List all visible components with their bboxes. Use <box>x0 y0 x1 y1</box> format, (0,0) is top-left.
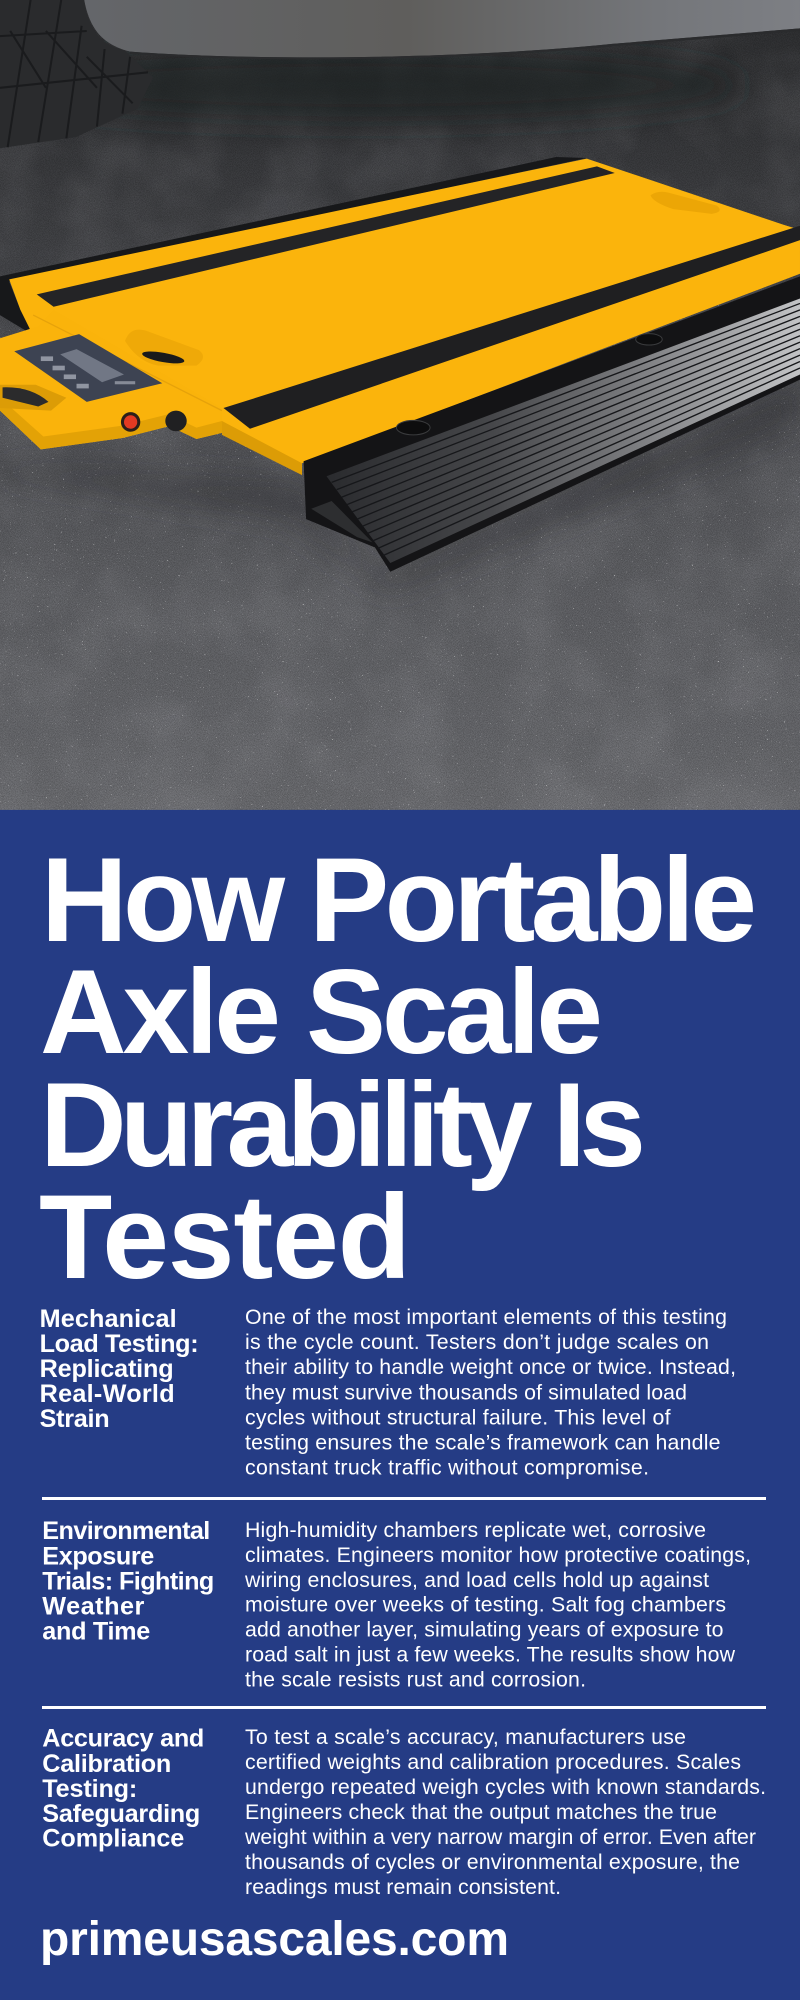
section 3 body: To test a scale’s accuracy, manufacturers use <box>245 1725 686 1749</box>
section 2 body: the scale resists rust and corrosion. <box>245 1668 586 1692</box>
title <box>39 833 757 1304</box>
title: Tested <box>39 1170 411 1304</box>
title: Durability Is <box>40 1058 646 1192</box>
blue content panel <box>0 810 800 2000</box>
section 3 body: certified weights and calibration procedures. Scales <box>245 1750 741 1774</box>
section 2 body: wiring enclosures, and load cells hold up against <box>244 1568 709 1592</box>
display panel <box>14 334 162 402</box>
section 1 body <box>245 1305 736 1480</box>
section 1 body: constant truck traffic without compromise. <box>245 1456 649 1480</box>
section 2 body: High-humidity chambers replicate wet, corrosive <box>245 1518 706 1542</box>
section 3 heading <box>42 1724 204 1852</box>
tire <box>0 0 153 148</box>
section 1 body: One of the most important elements of this testing <box>245 1305 727 1329</box>
section 1 heading: Replicating <box>40 1355 174 1383</box>
section 3 heading: Testing: <box>42 1775 137 1803</box>
section 2 heading: and Time <box>42 1618 150 1646</box>
controller housing <box>0 310 222 449</box>
section 3 heading: Accuracy and <box>42 1724 204 1752</box>
black knob <box>165 411 187 431</box>
car body <box>84 0 800 59</box>
footer website: primeusascales.com <box>40 1913 509 1966</box>
red button <box>121 412 140 432</box>
section 1 heading: Strain <box>40 1405 110 1433</box>
photo: portable axle scale on asphalt <box>0 0 800 810</box>
hardware at rear left <box>0 157 587 331</box>
rear black strip <box>37 166 615 307</box>
section 1 heading: Real-World <box>40 1380 175 1408</box>
yellow deck <box>9 159 800 463</box>
section 1 body: is the cycle count. Testers don’t judge scales on <box>245 1330 709 1354</box>
section 2 body: moisture over weeks of testing. Salt fog chambers <box>245 1592 726 1616</box>
section 1 body: testing ensures the scale’s framework can handle <box>245 1430 720 1454</box>
section 1 body: cycles without structural failure. This level of <box>245 1406 671 1430</box>
far handle slot <box>651 192 720 214</box>
section 1 heading: Mechanical <box>40 1305 177 1333</box>
front black strip <box>223 226 800 429</box>
scale platform <box>0 157 800 475</box>
section 3 heading: Compliance <box>42 1824 184 1852</box>
section 2 body: add another layer, simulating years of exposure to <box>245 1618 724 1642</box>
section 3 body: Engineers check that the output matches the true <box>245 1800 717 1824</box>
section 1 heading: Load Testing: <box>40 1330 199 1358</box>
section 2 heading: Weather <box>42 1592 144 1620</box>
section 3 heading: Safeguarding <box>42 1800 200 1828</box>
rubber ramp <box>304 276 800 572</box>
section 1 heading <box>40 1305 199 1433</box>
section 3 heading: Calibration <box>42 1750 171 1778</box>
section 2 body: climates. Engineers monitor how protective coatings, <box>245 1543 751 1567</box>
section 3 body: readings must remain consistent. <box>245 1875 561 1899</box>
title: How Portable <box>41 833 757 967</box>
platform underside thickness <box>222 419 302 475</box>
carry handle <box>0 385 66 411</box>
section 2 heading: Environmental <box>42 1517 210 1545</box>
section 2 heading: Exposure <box>42 1542 154 1570</box>
section 3 body: weight within a very narrow margin of error. Even after <box>244 1825 756 1849</box>
controller edge <box>0 398 222 449</box>
title: Axle Scale <box>40 945 603 1079</box>
asphalt ground <box>0 0 800 810</box>
section 1 body: their ability to handle weight once or twice. Instead, <box>245 1355 736 1379</box>
section 3 body: thousands of cycles or environmental exposure, the <box>245 1850 740 1874</box>
section 3 body <box>244 1725 766 1899</box>
near handle slot <box>125 330 203 366</box>
bolts <box>396 420 430 435</box>
section 2 heading: Trials: Fighting <box>42 1568 214 1596</box>
section 2 body <box>244 1518 751 1692</box>
section 3 body: undergo repeated weigh cycles with known standards. <box>245 1775 766 1799</box>
section 1 body: they must survive thousands of simulated load <box>245 1380 687 1404</box>
section 2 body: road salt in just a few weeks. The results show how <box>245 1642 736 1666</box>
section 2 heading <box>42 1517 214 1646</box>
